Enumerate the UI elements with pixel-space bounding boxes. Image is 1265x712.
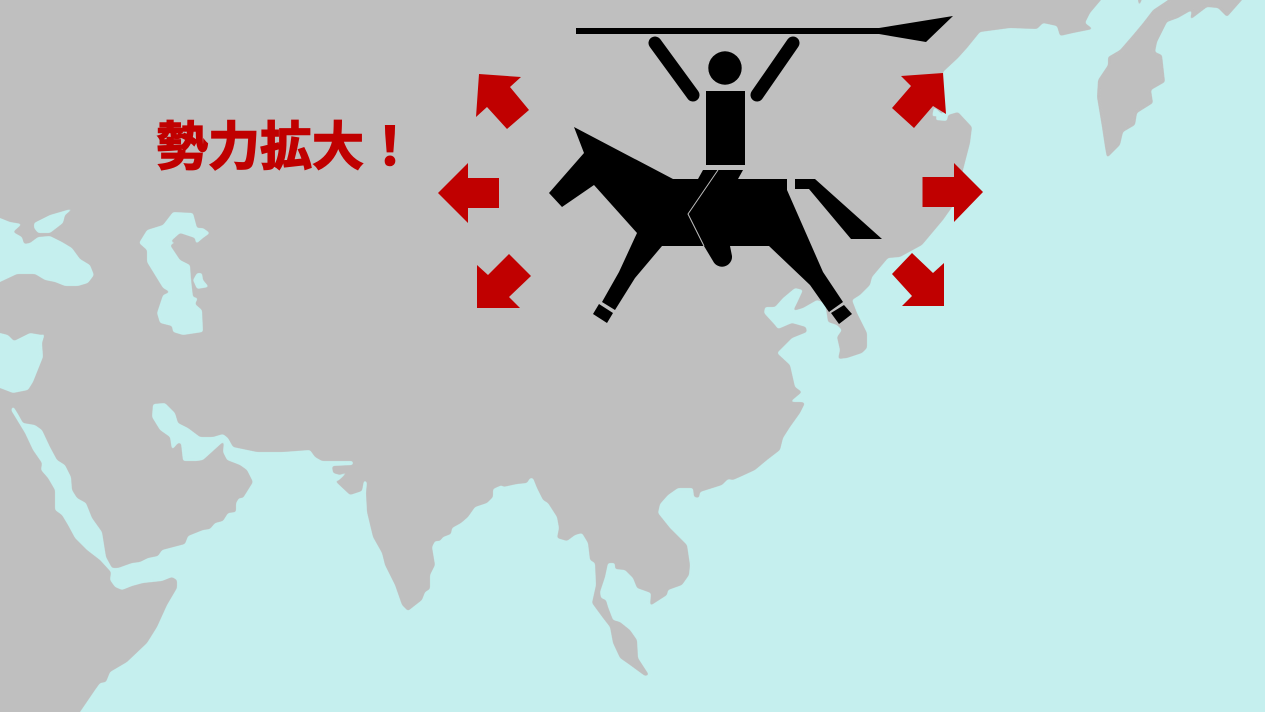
rider leg outline [688,170,718,246]
arrow: southeast [892,253,944,306]
rider head [708,51,742,85]
arrow: northeast [892,73,946,128]
arrow: northwest [476,74,529,129]
arrow: west [438,163,499,223]
horse tail [795,179,882,239]
arrow: southwest [477,254,531,308]
icon: horse rider [549,16,953,324]
heading: 勢力拡大！ [156,119,416,177]
spear [576,16,953,42]
rider arms [655,43,793,95]
arrow: east [922,163,983,222]
horse body [549,127,843,312]
front hoof [593,304,613,323]
hind hoof [831,305,852,324]
rider torso [706,91,745,165]
